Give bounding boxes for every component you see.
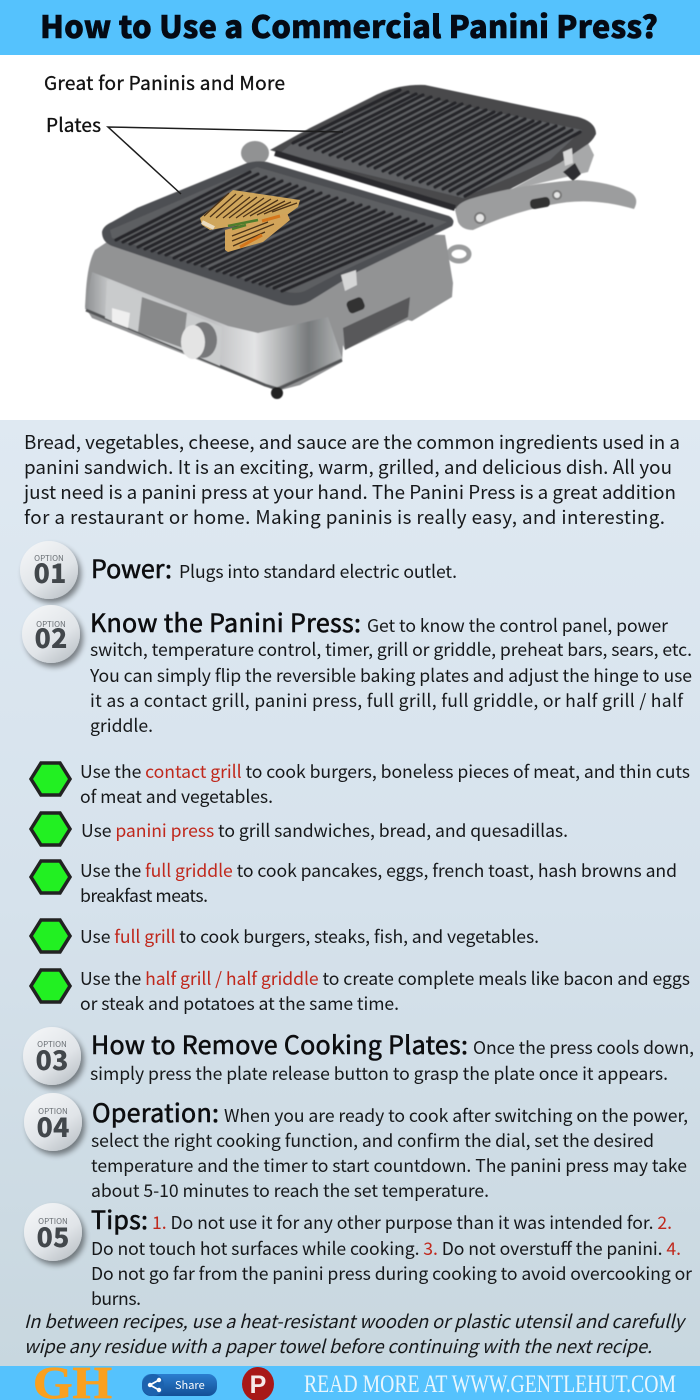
icon: pinterest: P [250,1371,266,1399]
power button [112,308,130,328]
step 04: operation: temperature and the timer to start countdown. The panini press may take [91,1153,687,1178]
plates label with pointers [46,111,343,194]
base body [85,230,453,391]
control panel [105,280,222,366]
front clip [341,270,357,291]
step 01: power: Plugs into standard electric outlet. [179,559,457,584]
step 04: operation: Operation: [92,1094,219,1130]
badge 03: 03 [36,1039,68,1078]
bullet: contact grill: Use the contact grill to cook burgers, boneless pieces of meat, and thin cuts [80,759,690,784]
bullet: half grill half griddle [31,966,690,1016]
step 05: tips: Tips: [91,1201,148,1237]
plates label with pointers: Plates [46,111,101,138]
intro paragraph: Bread, vegetables, cheese, and sauce are the common ingredients used in a [24,428,680,455]
back ring [449,247,469,261]
hinge knob [241,141,269,165]
badge 03: OPTION [37,1039,67,1050]
bullet: contact grill [31,759,690,809]
side button [345,296,366,314]
step 02: know the panini press: Get to know the control panel, power [367,613,668,638]
badge 02: OPTION [36,619,66,630]
display [138,297,187,348]
share button: Share [175,1377,205,1393]
illustration: panini press [85,85,636,399]
foot [271,387,283,399]
step 02: know the panini press: switch, temperature control, timer, grill or griddle, preheat bars, sears, etc. [90,637,692,662]
bullet: full griddle [31,858,677,908]
badge 01: 01 [34,552,66,591]
step 05: tips: burns. [91,1286,141,1311]
bullet: full griddle: breakfast meats. [80,883,208,908]
intro paragraph [23,428,680,530]
badge 02 [22,605,80,663]
underside edge [86,310,342,389]
badge 05 [24,1203,82,1261]
badge 04: OPTION [38,1106,68,1117]
upper plate rim [270,85,596,210]
silver front [85,272,342,387]
bullet: full griddle: Use the full griddle to cook pancakes, eggs, french toast, hash browns and [80,858,677,883]
upper plate ridges [293,90,580,196]
badge 05: 05 [37,1216,69,1255]
step 04: operation [91,1094,688,1203]
bullet: contact grill: of meat and vegetables. [80,784,273,809]
badge 04: 04 [37,1106,69,1145]
step 03: remove cooking plates [90,1026,694,1086]
step 02: know the panini press [89,604,692,738]
vent [343,297,410,350]
closing note: wipe any residue with a paper towel before continuing with the next recipe. [24,1333,652,1359]
intro paragraph: just need is a panini press at your hand. The Panini Press is a great addition [23,478,676,505]
step 01: power: Power: [91,550,172,586]
step 04: operation: select the right cooking function, and confirm the dial, set the desired [91,1128,654,1153]
closing note: In between recipes, use a heat-resistant wooden or plastic utensil and carefully [24,1308,687,1334]
page background [0,420,700,1366]
upper plate surface [280,93,582,198]
step 05: tips: Do not go far from the panini press during cooking to avoid overcooking or [91,1261,692,1286]
badge 03 [23,1027,81,1085]
step 02: know the panini press: griddle. [90,713,153,738]
footer bar [0,1357,700,1400]
step 02: know the panini press: You can simply flip the reversible baking plates and adjust the hinge to use [89,663,692,688]
lower plate ridges [116,172,432,291]
bullet: half grill half griddle: or steak and potatoes at the same time. [80,991,399,1016]
step 03: remove cooking plates: How to Remove Cooking Plates: [91,1026,468,1062]
closing note [24,1308,687,1359]
step 03: remove cooking plates: simply press the plate release button to grasp the plate once it appears. [90,1061,668,1086]
icon: pinterest [242,1367,274,1400]
badge 01: OPTION [34,553,64,564]
handle bolt [475,213,485,223]
intro paragraph: for a restaurant or home. Making paninis is really easy, and interesting. [24,503,665,530]
share button [142,1374,217,1396]
lower plate rim [102,161,453,306]
step 04: operation: about 5-10 minutes to reach the set temperature. [91,1178,489,1203]
handle [455,180,636,230]
step 05: tips: Do not touch hot surfaces while cooking. 3. Do not overstuff the panini. 4. [91,1236,681,1261]
bullet: half grill half griddle: Use the half grill / half griddle to create complete meals like bacon and eggs [80,966,690,991]
step 01: power [91,550,457,586]
bullet: panini press: Use panini press to grill sandwiches, bread, and quesadillas. [81,818,568,843]
badge 05: OPTION [38,1216,68,1227]
step 03: remove cooking plates: Once the press cools down, [473,1035,694,1060]
badge 02: 02 [35,617,67,656]
badge 04 [24,1093,82,1151]
upper arm bracket [510,143,594,190]
step 02: know the panini press: Know the Panini Press: [90,604,361,640]
small bolt [553,191,561,199]
title banner: How to Use a Commercial Panini Press? [40,2,658,47]
step 05: tips: 1. Do not use it for any other purpose than it was intended for. 2. [152,1210,672,1235]
hinge band [275,153,455,208]
image caption: Great for Paninis and More [44,69,285,96]
upper clip [563,148,573,166]
step 04: operation: When you are ready to cook after switching on the power, [224,1103,688,1128]
dial [181,322,217,359]
badge 01 [20,541,78,599]
lower plate surface [110,167,447,293]
dark bracket [563,163,581,181]
step 02: know the panini press: it as a contact grill, panini press, full grill, full griddle, or half grill / half [90,688,684,713]
handle switch [529,196,551,210]
bullet: full grill: Use full grill to cook burgers, steaks, fish, and vegetables. [80,924,539,949]
sandwich [200,190,300,252]
intro paragraph: panini sandwich. It is an exciting, warm, grilled, and delicious dish. All you [24,453,672,480]
step 05: tips [91,1201,692,1311]
